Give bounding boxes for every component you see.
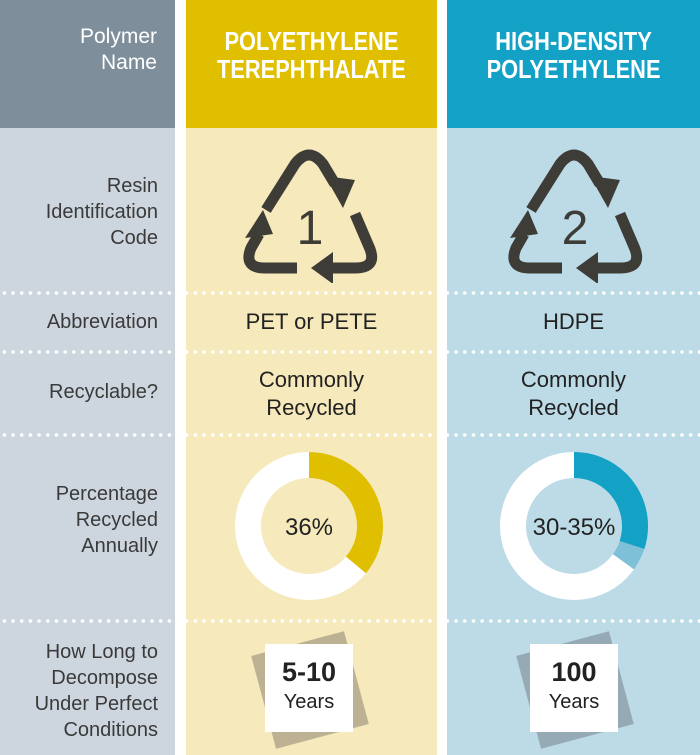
- header: polymer name label: [0, 0, 175, 128]
- card: HDPE 100 years: 100: [551, 657, 597, 687]
- header: HDPE: HIGH-DENSITY: [495, 26, 652, 56]
- text: HDPE abbreviation: HDPE: [543, 309, 604, 334]
- donut: HDPE 30-35%: [500, 452, 648, 600]
- label: abbreviation: Abbreviation: [47, 311, 158, 333]
- label: resin code: Identification: [46, 201, 158, 223]
- label: resin code: Resin: [107, 175, 158, 197]
- label: decompose: [35, 641, 158, 741]
- card: PET 5-10 years: Years: [284, 691, 334, 713]
- text: PET recyclable: [259, 367, 364, 420]
- label: percentage: [56, 483, 158, 557]
- text: PET recyclable: Commonly: [259, 367, 364, 392]
- label: resin code: [46, 175, 158, 249]
- text: HDPE recyclable: [521, 367, 626, 420]
- donut: HDPE 30-35%: 30-35%: [533, 514, 615, 541]
- label: recyclable: Recyclable?: [49, 381, 158, 403]
- label: decompose: Under Perfect: [35, 693, 158, 715]
- text: PET abbreviation: PET or PETE: [246, 309, 377, 334]
- header: PET: TEREPHTHALATE: [217, 54, 406, 84]
- donut: PET 36%: [235, 452, 383, 600]
- label: decompose: How Long to: [46, 641, 158, 663]
- label: percentage: Annually: [81, 535, 158, 557]
- text: HDPE recyclable: Commonly: [521, 367, 626, 392]
- header: PET: [186, 0, 437, 128]
- donut: PET 36%: 36%: [285, 514, 333, 541]
- icon: recycle 1: [243, 150, 378, 283]
- label: resin code: Code: [110, 227, 158, 249]
- header: PET: POLYETHYLENE: [225, 26, 398, 56]
- icon: recycle 2: 2: [562, 202, 588, 255]
- card: HDPE 100 years: Years: [549, 691, 599, 713]
- icon: recycle 2: [508, 150, 642, 283]
- label: percentage: Recycled: [76, 509, 158, 531]
- text: HDPE recyclable: Recycled: [528, 395, 619, 420]
- card: PET 5-10 years: [251, 631, 369, 749]
- header: HDPE: [447, 0, 700, 128]
- header: HDPE: POLYETHYLENE: [487, 54, 660, 84]
- label: percentage: Percentage: [56, 483, 158, 505]
- icon: recycle 1: 1: [297, 202, 323, 255]
- label: decompose: Decompose: [51, 667, 158, 689]
- text: PET recyclable: Recycled: [266, 395, 357, 420]
- header: polymer name label: Polymer: [80, 25, 157, 48]
- card: PET 5-10 years: 5-10: [282, 657, 336, 687]
- label: decompose: Conditions: [63, 719, 158, 741]
- header: polymer name label: Name: [101, 51, 157, 74]
- card: HDPE 100 years: [516, 631, 634, 749]
